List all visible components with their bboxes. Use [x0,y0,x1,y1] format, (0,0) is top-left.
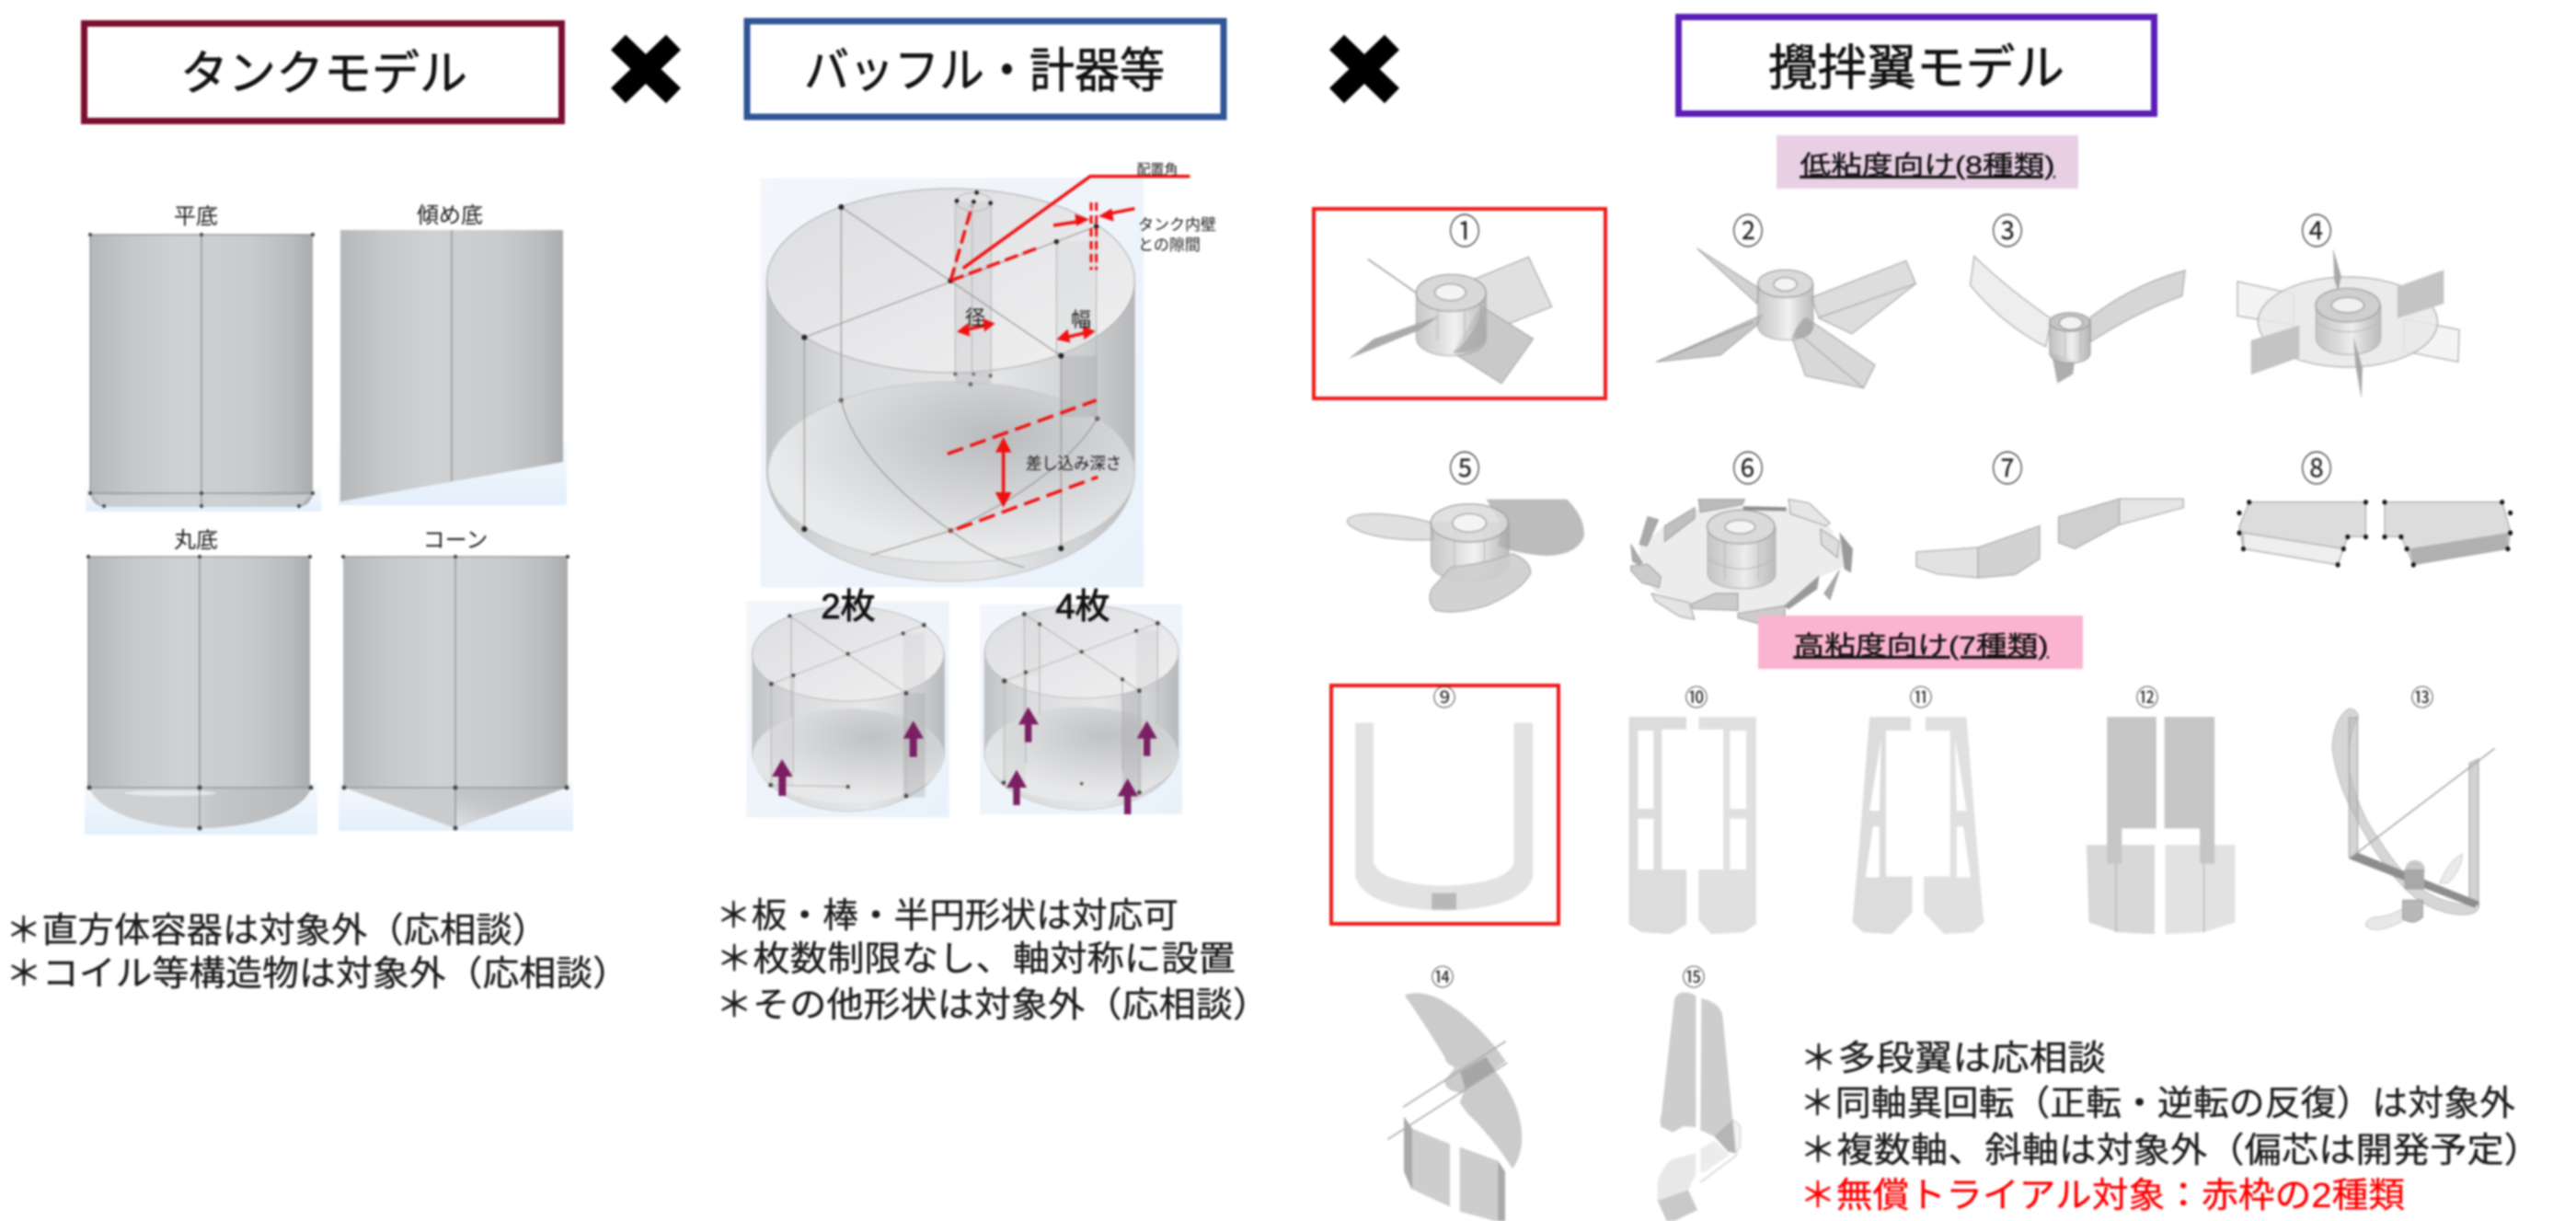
notes: tank: ＊コイル等構造物は対象外（応相談） [6,955,629,994]
impeller 4 [2237,212,2459,398]
label: 低粘度向け: 低粘度向け(8種類) [1800,151,2055,179]
heading: タンクモデル [85,24,561,121]
notes: impeller [1800,1040,2541,1215]
impeller 1: ① [1449,212,1480,252]
impeller 5 [1347,449,1584,612]
diagram: baffle tank with dimensions: 幅 [1071,308,1091,331]
impeller 11: ⑪ [1909,685,1933,711]
tank: コーン [339,528,573,831]
diagram: 4 baffles [980,588,1182,814]
diagram: 2 baffles: 2枚 [821,588,876,627]
impeller 2 [1656,212,1915,388]
impeller 13 [2332,685,2495,929]
notes: impeller: ＊多段翼は応相談 [1800,1040,2106,1078]
impeller 9: ⑨ [1432,685,1456,711]
impeller 12 [2087,685,2236,934]
impeller 6: ⑥ [1732,449,1764,490]
impeller 2: ② [1732,212,1764,252]
tank: 傾め底: 傾め底 [417,203,483,228]
red frame: impeller 9 [1331,685,1558,924]
diagram: 2 baffles [747,588,949,817]
impeller 8 [2239,449,2511,565]
impeller 12: ⑫ [2135,685,2159,711]
heading: 攪拌翼モデル: 攪拌翼モデル [1768,41,2064,96]
tank: 丸底 [85,528,317,835]
diagram: baffle tank with dimensions: 径 [965,306,985,329]
diagram: 4 baffles: 4枚 [1055,588,1110,627]
heading: 攪拌翼モデル [1678,17,2155,114]
notes: baffle: ＊その他形状は対象外（応相談） [716,986,1270,1025]
impeller 8: ⑧ [2301,449,2332,490]
tank: 平底: 平底 [174,204,218,229]
impeller 13: ⑬ [2410,685,2434,711]
impeller 4: ④ [2301,212,2332,252]
impeller 9 [1355,685,1533,911]
impeller 10: ⑩ [1685,685,1708,711]
impeller 14 [1387,965,1522,1221]
impeller 7 [1916,449,2183,578]
impeller 11 [1852,685,1984,934]
diagram: baffle tank with dimensions: タンク内壁 [1138,216,1216,234]
diagram: baffle tank with dimensions: 配置角 [1136,162,1179,178]
notes: baffle: ＊板・棒・半円形状は対応可 [716,897,1179,936]
multiply mark 1 [618,42,673,96]
impeller 15: ⑮ [1682,965,1706,991]
notes: baffle [716,897,1270,1025]
diagram: baffle tank with dimensions [761,162,1216,587]
label: 高粘度向け [1758,616,2083,669]
multiply mark 2 [1337,42,1392,96]
notes: impeller: ＊複数軸、斜軸は対象外（偏芯は開発予定） [1800,1132,2541,1170]
impeller 10 [1629,685,1756,934]
impeller 7: ⑦ [1992,449,2023,490]
notes: impeller: ＊無償トライアル対象：赤枠の2種類 [1800,1177,2405,1215]
notes: tank [6,912,629,994]
impeller 5: ⑤ [1449,449,1480,490]
heading: タンクモデル: タンクモデル [180,48,467,101]
label: 低粘度向け [1777,135,2078,189]
notes: tank: ＊直方体容器は対象外（応相談） [6,912,548,950]
notes: baffle: ＊枚数制限なし、軸対称に設置 [716,940,1236,979]
diagram: baffle tank with dimensions: 差し込み深さ [1026,455,1121,473]
impeller 15 [1658,965,1741,1221]
impeller 1 [1349,212,1552,384]
heading: バッフル・計器等: バッフル・計器等 [804,45,1165,98]
red frame: impeller 1 [1314,209,1605,398]
tank: コーン: コーン [423,528,488,553]
impeller 3 [1971,212,2185,384]
notes: impeller: ＊同軸異回転（正転・逆転の反復）は対象外 [1800,1085,2515,1123]
tank: 傾め底 [339,203,567,505]
label: 高粘度向け: 高粘度向け(7種類) [1794,631,2048,660]
impeller 6 [1631,449,1853,624]
tank: 平底 [86,204,321,512]
impeller 14: ⑭ [1431,965,1455,991]
heading: バッフル・計器等 [747,21,1224,117]
tank: 丸底: 丸底 [174,528,218,553]
impeller 3: ③ [1992,212,2023,252]
diagram: baffle tank with dimensions: との隙間 [1138,236,1201,254]
